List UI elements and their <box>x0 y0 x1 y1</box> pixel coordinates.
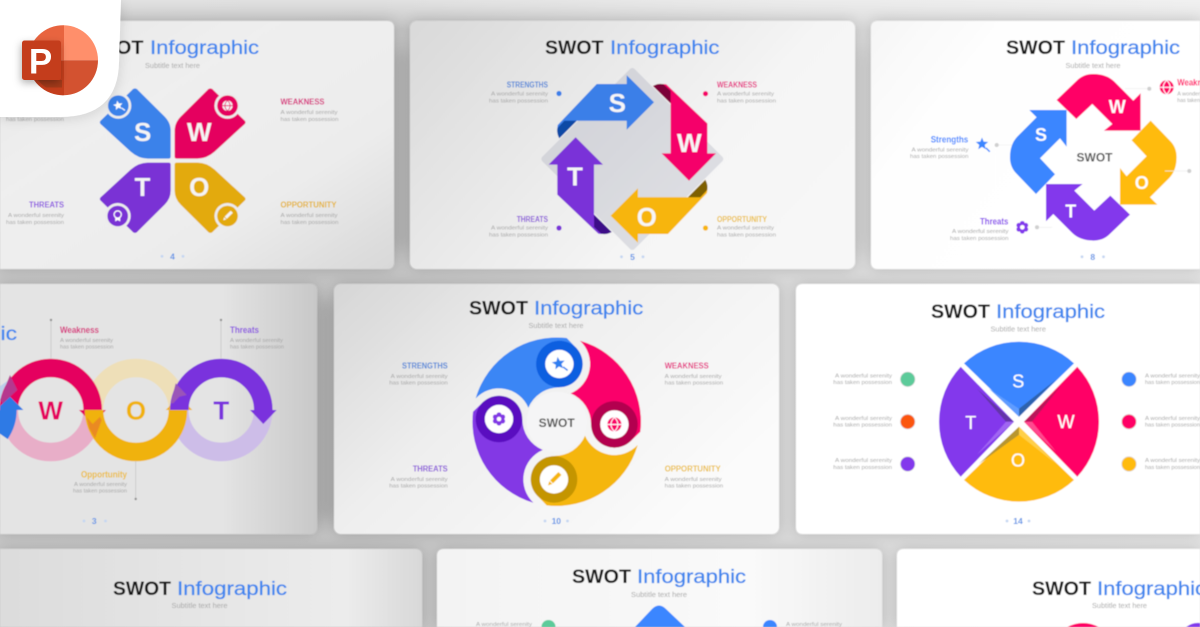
ring S arrowhead over overlap <box>0 397 23 410</box>
text: threats <box>220 319 284 358</box>
title <box>1032 578 1200 600</box>
letters: T <box>567 162 583 192</box>
text and icon: weakness <box>1125 78 1200 104</box>
white corner panel <box>0 0 121 117</box>
ring tints <box>0 368 263 452</box>
text: threats: A wonderful serenity <box>8 213 64 219</box>
letters <box>567 88 702 232</box>
left list: has taken possession <box>833 380 892 386</box>
page number <box>544 516 569 526</box>
text: weakness <box>280 98 338 123</box>
right list: A wonderful serenity <box>1145 416 1200 422</box>
page number: 10 <box>552 516 561 526</box>
text: opportunity: A wonderful serenity <box>280 213 338 219</box>
page number: 14 <box>1013 516 1023 526</box>
subtitle: Subtitle text here <box>528 323 584 330</box>
text and icon: strengths <box>910 134 1012 160</box>
text: opportunity: has taken possession <box>280 220 338 226</box>
title: Infographic <box>1097 578 1200 600</box>
quadrant letters: T <box>965 413 976 433</box>
letters: S <box>1035 125 1047 145</box>
title: SWOT <box>1006 37 1065 59</box>
quadrant T <box>939 367 1014 477</box>
letters: S <box>609 88 626 118</box>
text: opportunity: has taken possession <box>665 484 723 490</box>
ring T <box>179 368 277 424</box>
left list: has taken possession <box>833 465 892 471</box>
left list <box>833 372 915 471</box>
title <box>113 578 287 600</box>
page number <box>1006 516 1030 526</box>
left list: has taken possession <box>833 422 892 428</box>
text: threats: has taken possession <box>230 344 284 350</box>
text: weakness: has taken possession <box>717 98 776 104</box>
connector: opportunity <box>1165 169 1191 173</box>
PowerPoint badge <box>0 0 121 117</box>
text: weakness: A wonderful serenity <box>60 338 113 344</box>
text: opportunity <box>665 465 723 490</box>
text and icon: strengths: Strengths <box>931 134 968 144</box>
text: strengths: STRENGTHS <box>402 362 448 370</box>
subtitle: Subtitle text here <box>1066 63 1121 70</box>
text: strengths: A wonderful serenity <box>491 92 548 98</box>
ring letters <box>38 396 229 426</box>
text: threats: THREATS <box>517 215 549 224</box>
quadrant W <box>1024 367 1099 477</box>
card <box>796 284 1200 534</box>
text: weakness: has taken possession <box>280 117 338 123</box>
title <box>545 37 720 59</box>
text and icon: strengths: has taken possession <box>910 154 968 160</box>
text and icon: threats: Threats <box>980 216 1008 226</box>
title: Infographic <box>610 37 720 59</box>
text: threats: A wonderful serenity <box>230 338 283 344</box>
text: weakness: A wonderful serenity <box>665 374 722 380</box>
left list: A wonderful serenity <box>835 416 892 422</box>
title <box>572 566 746 588</box>
text: threats: A wonderful serenity <box>491 226 548 232</box>
text: weakness: has taken possession <box>665 380 723 386</box>
text: weakness: WEAKNESS <box>717 80 758 90</box>
text: opportunity: has taken possession <box>73 488 127 494</box>
arrow W <box>653 84 716 181</box>
card <box>897 549 1200 627</box>
text and icon: threats <box>950 216 1052 242</box>
text: weakness: A wonderful serenity <box>280 110 338 116</box>
text: threats: THREATS <box>29 200 65 210</box>
right item <box>763 620 842 627</box>
text: threats <box>389 465 448 490</box>
text: opportunity: has taken possession <box>717 232 776 238</box>
page number <box>161 251 184 261</box>
text: threats: Threats <box>230 325 259 335</box>
ring letters: O <box>126 396 146 426</box>
logo circle <box>28 25 98 95</box>
petal S <box>100 88 171 159</box>
text: weakness: A wonderful serenity <box>717 92 774 98</box>
right list: A wonderful serenity <box>1145 458 1200 464</box>
arrow O <box>611 180 707 243</box>
arrow T <box>1046 184 1130 241</box>
title fragment: ic <box>0 323 17 345</box>
letters: O <box>637 202 657 232</box>
segment T <box>472 396 543 503</box>
text: opportunity: Opportunity <box>81 470 127 480</box>
text: weakness: WEAKNESS <box>280 98 325 106</box>
slide 3: linked rings <box>0 284 317 534</box>
text: weakness: WEAKNESS <box>665 362 709 370</box>
right list: has taken possession <box>1145 422 1200 428</box>
slide 5: arrows on diamond <box>410 21 855 269</box>
text: opportunity <box>280 200 338 226</box>
page number <box>83 516 107 526</box>
text remnant: strengths: has taken possession <box>6 117 64 123</box>
page number <box>1081 252 1105 262</box>
text: opportunity: OPPORTUNITY <box>665 465 721 474</box>
arrow W <box>1057 74 1141 131</box>
text: opportunity: A wonderful serenity <box>717 226 774 232</box>
text: opportunity <box>703 215 776 238</box>
text: threats: has taken possession <box>6 220 64 226</box>
text and icon: strengths: A wonderful serenity <box>912 148 969 154</box>
center circle <box>527 392 587 452</box>
text: weakness: Weakness <box>60 325 99 335</box>
segment W <box>571 341 641 448</box>
title: Infographic <box>637 566 746 588</box>
title <box>84 37 259 59</box>
right list <box>1122 372 1200 471</box>
subtitle: Subtitle text here <box>990 326 1046 334</box>
arrow S <box>557 75 654 138</box>
title: SWOT <box>84 37 144 59</box>
left list: A wonderful serenity <box>835 458 892 464</box>
title: Infographic <box>1071 37 1180 59</box>
ring letters: W <box>38 396 63 426</box>
text: threats: THREATS <box>413 465 448 474</box>
quadrant S <box>964 342 1074 417</box>
subtitle: Subtitle text here <box>631 592 687 599</box>
title: SWOT <box>545 37 604 59</box>
page number <box>620 252 644 262</box>
text: threats <box>489 215 562 238</box>
text: opportunity: A wonderful serenity <box>665 477 722 483</box>
segment O <box>531 436 638 506</box>
bottom slide right <box>897 549 1200 627</box>
card <box>0 549 422 627</box>
subtitle: Subtitle text here <box>1092 603 1147 610</box>
right list: has taken possession <box>1145 380 1200 386</box>
text: strengths <box>389 362 448 386</box>
text: threats: has taken possession <box>389 484 448 490</box>
quadrant O <box>964 427 1074 502</box>
bottom slide center <box>437 549 882 627</box>
purple shape top <box>1186 623 1200 627</box>
text: strengths: has taken possession <box>389 380 448 386</box>
ring O <box>94 397 192 452</box>
petal O <box>175 163 246 233</box>
petal W <box>175 88 246 159</box>
card <box>871 21 1200 269</box>
petal O: O <box>189 172 209 202</box>
quadrant letters: W <box>1058 412 1074 432</box>
text: opportunity: A wonderful serenity <box>74 482 127 488</box>
card <box>334 284 779 534</box>
title: Infographic <box>996 301 1105 323</box>
ring letters: T <box>213 396 229 426</box>
letters <box>1035 97 1149 222</box>
text: opportunity: OPPORTUNITY <box>717 215 768 224</box>
text: threats: has taken possession <box>489 232 548 238</box>
title <box>469 298 644 320</box>
card <box>0 284 317 534</box>
segment S <box>476 337 583 408</box>
quadrant letters <box>965 372 1074 470</box>
letters: O <box>1135 173 1149 193</box>
arrow S <box>1010 110 1067 194</box>
quadrant letters: O <box>1011 450 1025 470</box>
card <box>0 21 394 269</box>
quadrant letters: S <box>1012 372 1024 392</box>
slide 4: butterfly SWOT <box>0 21 394 269</box>
page number: 8 <box>1090 252 1095 262</box>
card <box>437 549 882 627</box>
petal T: T <box>135 172 151 202</box>
blue shape top <box>635 606 685 627</box>
petal T <box>100 163 171 233</box>
card <box>410 21 855 269</box>
text: weakness <box>50 319 114 358</box>
ring W <box>9 368 106 424</box>
text: strengths: has taken possession <box>489 98 548 104</box>
slide 10: swirl pie <box>334 284 779 534</box>
slide 8: arrow ring <box>871 21 1200 269</box>
title: Infographic <box>150 37 259 59</box>
bottom slide left <box>0 549 422 627</box>
ring S <box>0 397 23 434</box>
right list: has taken possession <box>1145 465 1200 471</box>
right list: A wonderful serenity <box>1145 374 1200 380</box>
text: weakness: has taken possession <box>60 344 114 350</box>
petal S: S <box>134 117 151 147</box>
left item <box>476 620 556 627</box>
slide 14: quadrant pie <box>796 284 1200 534</box>
title: SWOT <box>469 298 528 320</box>
letters: W <box>1109 97 1126 117</box>
text and icon: threats: A wonderful serenity <box>952 229 1009 235</box>
title: Infographic <box>534 298 644 320</box>
ring overlaps <box>0 375 187 438</box>
title: Infographic <box>177 578 287 600</box>
center circle: SWOT <box>539 418 575 430</box>
text: opportunity: OPPORTUNITY <box>280 200 337 210</box>
arrow T <box>549 137 612 234</box>
title <box>931 301 1105 323</box>
title <box>1006 37 1180 59</box>
center label: SWOT <box>1076 152 1112 164</box>
text: threats <box>6 200 65 226</box>
letters: W <box>677 128 702 158</box>
logo tile: P <box>29 42 52 81</box>
page number: 5 <box>630 252 635 262</box>
text: weakness <box>665 362 723 386</box>
title: SWOT <box>1032 578 1091 600</box>
subtitle: Subtitle text here <box>145 63 200 70</box>
diamond backdrop <box>544 71 720 247</box>
text: weakness <box>703 80 776 104</box>
text: strengths <box>489 80 562 104</box>
petal W: W <box>187 117 212 147</box>
left list: A wonderful serenity <box>835 374 892 380</box>
subtitle: Subtitle text here <box>172 603 228 610</box>
page number: 3 <box>92 516 97 526</box>
arrow O <box>1120 121 1177 205</box>
title: SWOT <box>572 566 631 588</box>
page number: 4 <box>170 251 175 261</box>
pink shape top <box>1068 623 1098 627</box>
text: strengths: A wonderful serenity <box>391 374 448 380</box>
text: opportunity <box>73 461 137 500</box>
text: strengths: STRENGTHS <box>507 80 549 90</box>
title: SWOT <box>931 301 990 323</box>
text and icon: threats: has taken possession <box>950 236 1008 242</box>
title: SWOT <box>113 578 171 600</box>
text: threats: A wonderful serenity <box>391 477 448 483</box>
letters: T <box>1065 202 1076 222</box>
